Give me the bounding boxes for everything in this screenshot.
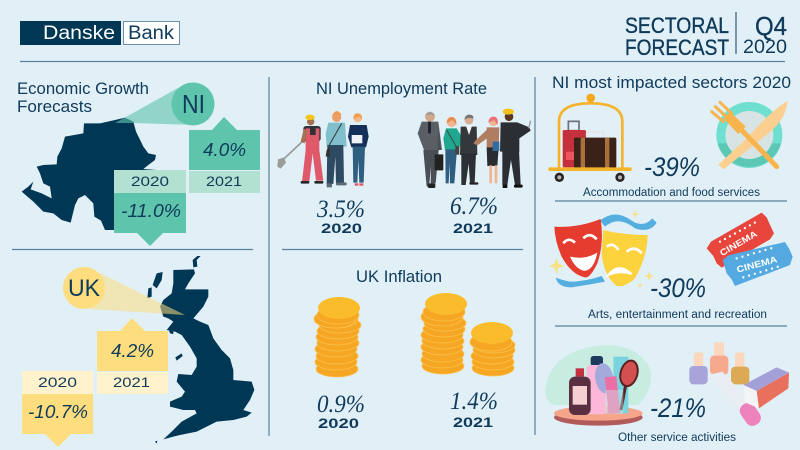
logo: Danske Bank: Bank (128, 23, 175, 44)
stat: 6.7% 2021 (450, 193, 498, 236)
UK 2021 box: 4.2%: 4.2% (111, 341, 154, 361)
heading: UK Inflation: UK Inflation (356, 267, 442, 286)
label: Accommodation and food services: Accommodation and food services (583, 187, 760, 199)
badge: UK: UK (68, 275, 100, 302)
UK 2021 box: 4.2% (97, 318, 168, 394)
map: Northern Ireland (22, 118, 160, 230)
UK 2021 box: 4.2%: 2021 (113, 374, 150, 390)
heading: Economic Growth Forecasts (17, 79, 149, 116)
stat: -21%: -21% (650, 393, 706, 423)
icon: toiletries on tray (545, 345, 651, 426)
panel: NI most impacted sectors (545, 73, 793, 444)
panel: UK economic growth (22, 256, 254, 447)
icon: theatre masks (549, 210, 657, 288)
badge: UK (63, 267, 105, 309)
stat: -39%: -39% (644, 152, 700, 182)
stat: 0.9% 2020: 0.9% (317, 391, 365, 418)
badge: NI (172, 82, 214, 126)
header title: Sectoral Forecast Q4 2020: 2020 (743, 37, 787, 58)
icon: plate with fork and knife (712, 101, 788, 169)
logo: Danske Bank (20, 21, 180, 45)
header title: Sectoral Forecast Q4 2020: Q4 (755, 11, 787, 41)
illustration: three workers (277, 111, 369, 187)
NI 2021 box: 4.0%: 2021 (206, 173, 242, 189)
illustration: five professionals (418, 109, 531, 188)
UK 2020 box: -10.7% (22, 371, 93, 447)
icon: nail polish and file (689, 342, 789, 429)
UK 2020 box: -10.7%: -10.7% (28, 402, 88, 422)
icon: cinema tickets: CINEMA (718, 228, 760, 258)
header title: Sectoral Forecast Q4 2020 (625, 11, 787, 60)
label: Arts, entertainment and recreation: Arts, entertainment and recreation (588, 309, 767, 321)
callout beam: UK (90, 273, 185, 315)
stat: 1.4% 2021: 2021 (453, 414, 493, 430)
stat: 6.7% 2021: 2021 (453, 220, 493, 236)
stat: 3.5% 2020: 3.5% (316, 196, 365, 223)
map: Great Britain (147, 256, 254, 444)
NI 2021 box: 4.0%: 4.0% (203, 140, 246, 160)
panel: NI economic growth (17, 79, 260, 246)
stat: 3.5% 2020 (316, 196, 365, 236)
stat: 3.5% 2020: 2020 (321, 220, 362, 236)
panel: NI unemployment rate (277, 79, 531, 236)
NI 2020 box: -11.0% (114, 170, 186, 246)
stat: 0.9% 2020: 2020 (318, 415, 359, 431)
NI 2020 box: -11.0%: -11.0% (121, 201, 181, 221)
logo: Danske Bank: Danske (43, 23, 115, 44)
header title: Sectoral Forecast Q4 2020: SECTORAL (625, 13, 729, 38)
stat: 1.4% 2021: 1.4% (450, 388, 498, 415)
badge: NI: NI (182, 89, 205, 119)
heading: NI Unemployment Rate: NI Unemployment Rate (316, 79, 487, 98)
illustration: coin stack 2020 (314, 297, 361, 377)
stat: -30%: -30% (650, 273, 706, 303)
heading: Economic Growth Forecasts: Economic Growth (17, 79, 149, 98)
stat: 0.9% 2020 (317, 391, 365, 431)
callout beam: NI (115, 88, 197, 125)
NI 2021 box: 4.0% (189, 117, 260, 193)
stat: 1.4% 2021 (450, 388, 498, 430)
stat: 6.7% 2021: 6.7% (450, 193, 498, 220)
illustration: coin stacks 2021 (421, 293, 515, 376)
icon: cinema tickets (707, 213, 793, 286)
heading: NI most impacted sectors 2020: NI most impacted sectors 2020 (552, 73, 791, 92)
icon: luggage cart (548, 94, 632, 182)
UK 2020 box: -10.7%: 2020 (38, 374, 77, 390)
heading: Economic Growth Forecasts: Forecasts (17, 97, 92, 116)
NI 2020 box: -11.0%: 2020 (131, 173, 169, 189)
header title: Sectoral Forecast Q4 2020: FORECAST (625, 35, 729, 60)
label: Other service activities: Other service activities (618, 432, 736, 444)
icon: cinema tickets: CINEMA (735, 254, 779, 275)
panel: UK inflation (314, 267, 515, 431)
